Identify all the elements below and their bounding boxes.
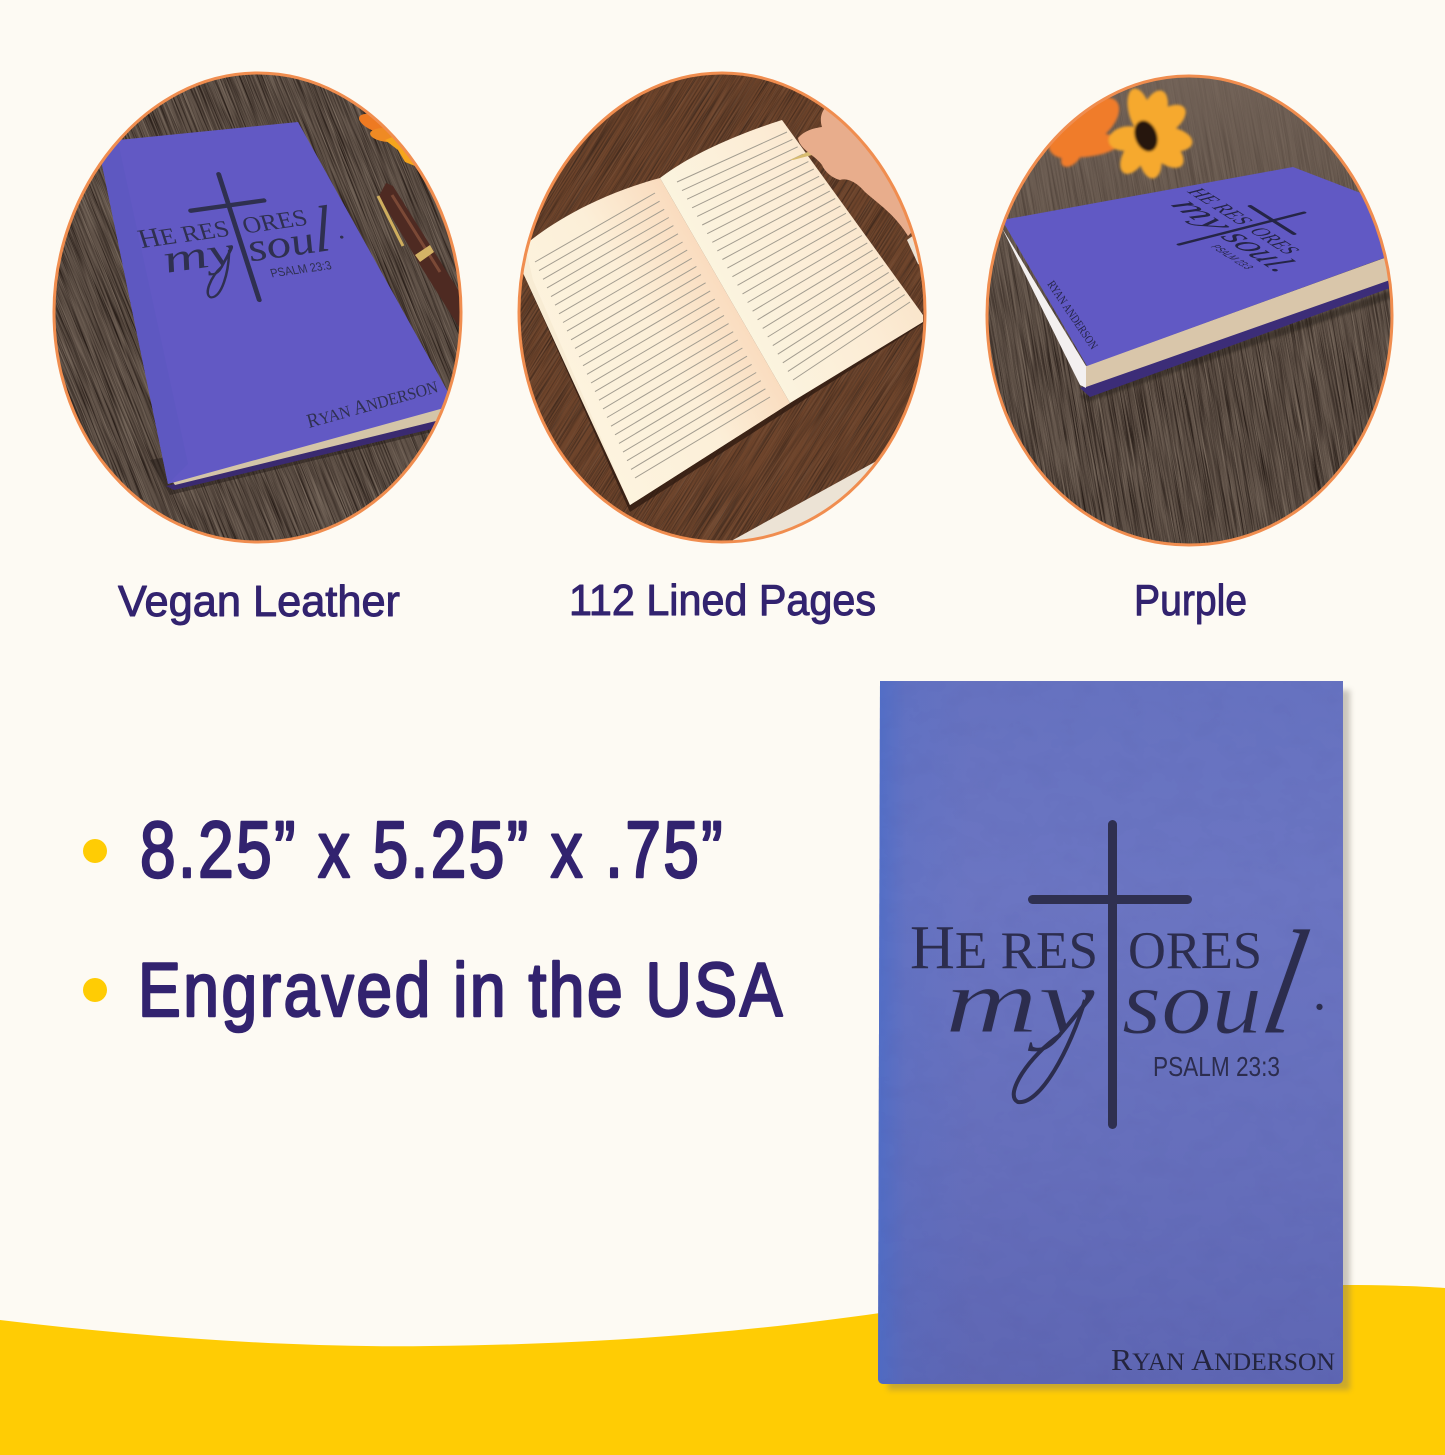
pen tip [790,152,812,160]
journal back cover [166,418,442,490]
shadow [888,690,1350,1390]
cover [878,681,1343,1384]
hand [798,103,914,236]
bullet dot [83,839,107,863]
rug right [907,236,919,264]
he restores: ORES [1128,922,1262,980]
engraved name: RYAN ANDERSON [304,375,440,433]
flower [359,114,415,166]
engraved design: sou [240,218,321,270]
journal pages [170,406,445,485]
engraved design: . [335,223,346,243]
my soul: my [945,950,1095,1052]
flower centre [1130,117,1162,155]
engraved design: my [1161,196,1247,234]
wood [830,0,1445,670]
notebook edge [523,245,790,505]
wood [56,74,459,540]
rug [733,462,876,540]
engraved design: my [156,229,241,282]
caption: lined pages: 112 Lined Pages [569,576,876,625]
engraved design: PSALM 23:3 [1207,244,1256,270]
engraved name: RYAN ANDERSON [1111,1342,1335,1377]
dimensions text: 8.25” x 5.25” x .75” [140,805,725,894]
engraved design [1119,176,1367,284]
journal spine [102,165,168,484]
engraved design [136,172,344,302]
bullet: dimensions [83,805,725,894]
leather texture [881,682,1342,1383]
engraved design: HE RES [1181,186,1260,227]
engraved name: RYAN ANDERSON [1045,278,1101,352]
oval border [987,76,1392,545]
yellow flower [1106,86,1194,180]
engraved design: PSALM 23:3 [268,258,333,280]
engraved design: ORES [239,205,311,239]
yellow wave [0,1285,1445,1455]
pen [378,183,462,332]
photo: journal side view with flower [830,0,1445,670]
white inner spine [1002,228,1086,388]
bullet: engraved [83,948,785,1033]
oval border [54,73,461,542]
my soul: . [1314,971,1325,1020]
oval border [519,73,925,542]
my soul [945,899,1325,1102]
journal shadow [1080,290,1392,402]
left page lines [535,193,770,478]
bullet dot [83,978,107,1002]
caption: vegan leather: Vegan Leather [118,577,400,626]
engraved design: ORES [1243,225,1307,256]
photo: open lined pages [518,72,926,544]
right page [660,120,923,403]
large journal front [878,681,1350,1390]
psalm reference: PSALM 23:3 [1153,1051,1280,1082]
engraved design: HE RES [134,213,233,255]
notebook shadow [523,273,925,512]
photo: closed journal on wood [52,72,462,544]
journal cover [100,122,448,484]
engraved design: soul. [1211,228,1312,276]
my soul: sou [1122,951,1262,1053]
spine tint [878,681,1343,1384]
he restores: HE RES [910,914,1098,982]
my soul: l [1251,899,1320,1066]
caption: purple: Purple [1134,576,1247,625]
pages [1086,256,1390,387]
wood [520,74,924,540]
back cover [1080,280,1390,397]
cover [1002,167,1392,366]
left page [525,178,790,505]
engraved text: Engraved in the USA [138,948,785,1033]
journal shadow [150,429,432,495]
right page lines [677,132,910,380]
cross [1028,820,1192,1129]
engraved design: l [311,193,333,267]
orange flower [1040,88,1128,171]
he restores [910,914,1262,982]
